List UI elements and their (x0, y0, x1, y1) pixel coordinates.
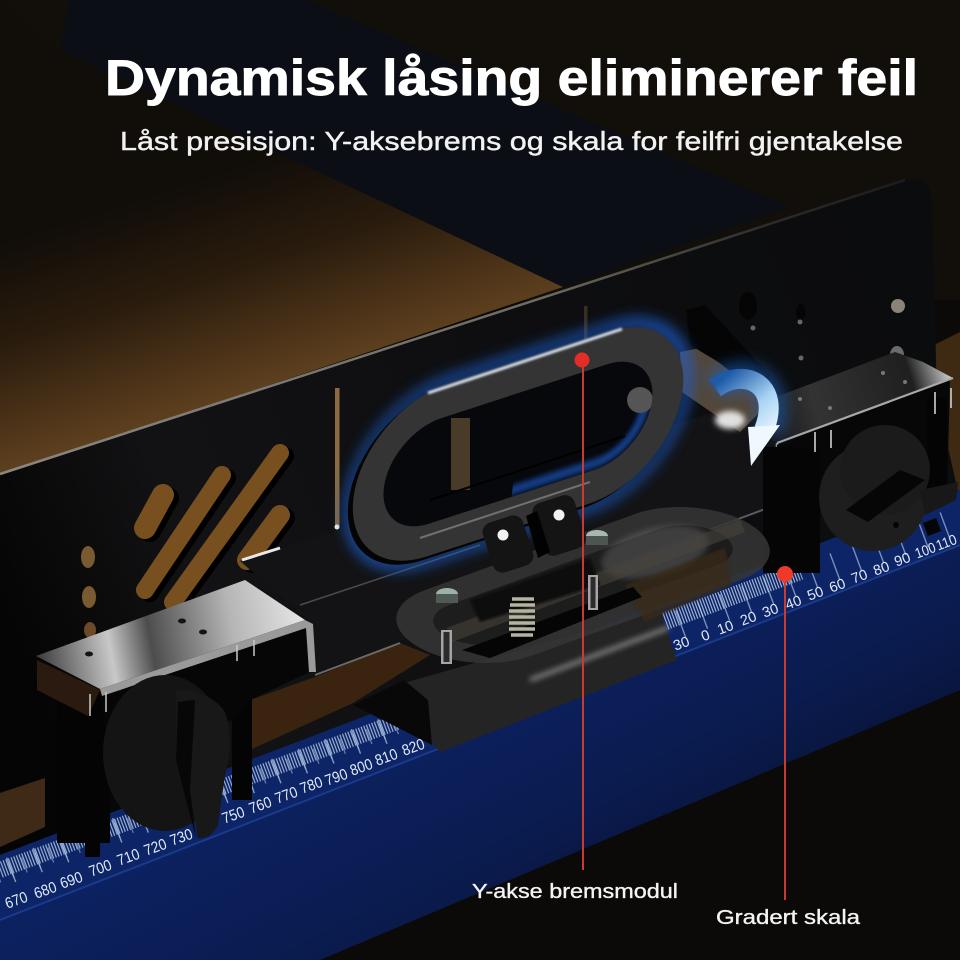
wedge: black rail clamp (353, 610, 677, 752)
left scale numbers: 770 (273, 784, 300, 808)
ring shadow edge (338, 308, 688, 588)
right scale ticks (660, 520, 960, 624)
curved rotation arrow (715, 376, 780, 466)
label: brake module: Y-akse bremsmodul (472, 880, 678, 903)
wood strip at right (930, 332, 960, 500)
callout: scale line (777, 566, 793, 900)
ring hole interior (375, 345, 661, 543)
left scale numbers: 680 (32, 879, 59, 903)
label: graduated scale: Gradert skala (716, 906, 861, 929)
right bracket (723, 352, 958, 573)
right scale numbers: 60 (827, 576, 848, 597)
mounting holes (739, 292, 905, 364)
plate slot shadows (150, 456, 285, 605)
wood visible under plate, centre (250, 643, 430, 750)
title: Dynamisk låsing eliminerer feil (105, 50, 918, 106)
right scale numbers: 70 (849, 567, 870, 588)
plate slots showing wood (145, 453, 280, 602)
black back plate (0, 179, 960, 860)
ring top highlight (428, 329, 622, 393)
right scale numbers: 90 (892, 550, 913, 571)
dark slot (462, 587, 642, 658)
right scale numbers: 40 (783, 593, 804, 614)
right top plate (723, 352, 953, 443)
lower brake plate ghost (363, 491, 803, 680)
left scale numbers: 790 (323, 766, 350, 790)
left scale numbers: 720 (142, 836, 169, 860)
left scale numbers: 810 (373, 746, 400, 770)
callout: brake module line (574, 352, 590, 870)
right scale numbers: 100 (913, 540, 938, 562)
left scale numbers: 800 (348, 756, 375, 780)
hinge barrels (480, 493, 589, 575)
wood seen through diagonal notch (680, 348, 770, 432)
right scale numbers: 20 (738, 609, 759, 630)
diagonal band across ghost plate (447, 520, 745, 642)
wood visible under plate, left (0, 778, 45, 847)
dark navy machine beam (60, 0, 790, 287)
brown band (625, 548, 732, 622)
left scale numbers: 750 (220, 804, 247, 828)
left scale numbers: 690 (58, 869, 85, 893)
right scale numbers: 30 (760, 601, 781, 622)
left scale numbers: 710 (115, 846, 142, 870)
diagonal dark notch (686, 305, 770, 392)
vertical slots (335, 388, 340, 526)
left scale ticks (0, 717, 410, 880)
left scale numbers (3, 736, 427, 913)
left bracket (36, 580, 316, 857)
right scale numbers: 80 (871, 559, 892, 580)
right scale numbers: 30 (671, 634, 692, 655)
right scale numbers: 0 (699, 627, 712, 645)
left scale numbers: 820 (400, 736, 427, 760)
right scale numbers: 50 (805, 584, 826, 605)
right scale numbers (671, 532, 959, 655)
brake ring (338, 304, 693, 588)
left scale numbers: 670 (3, 889, 30, 913)
blue glow around brake ring (339, 299, 697, 589)
left locking knob (103, 675, 227, 831)
subtitle: Låst presisjon: Y-aksebrems og skala for feilfri gjentakelse (120, 126, 903, 156)
left scale numbers: 700 (87, 857, 114, 881)
left scale numbers: 760 (247, 794, 274, 818)
channel plate between brackets (240, 410, 778, 675)
blue rail with scale (0, 490, 960, 960)
bolts and pins (436, 530, 608, 664)
silver top plate (36, 580, 305, 689)
wall details through hole (451, 418, 470, 490)
right locking knob (819, 443, 927, 551)
spring (509, 599, 535, 635)
left scale numbers: 730 (168, 826, 195, 850)
wooden table top (0, 0, 563, 475)
ring face (343, 304, 693, 584)
background: upper gloom (0, 0, 960, 300)
right scale numbers: 10 (715, 618, 736, 639)
left scale numbers: 780 (298, 774, 325, 798)
